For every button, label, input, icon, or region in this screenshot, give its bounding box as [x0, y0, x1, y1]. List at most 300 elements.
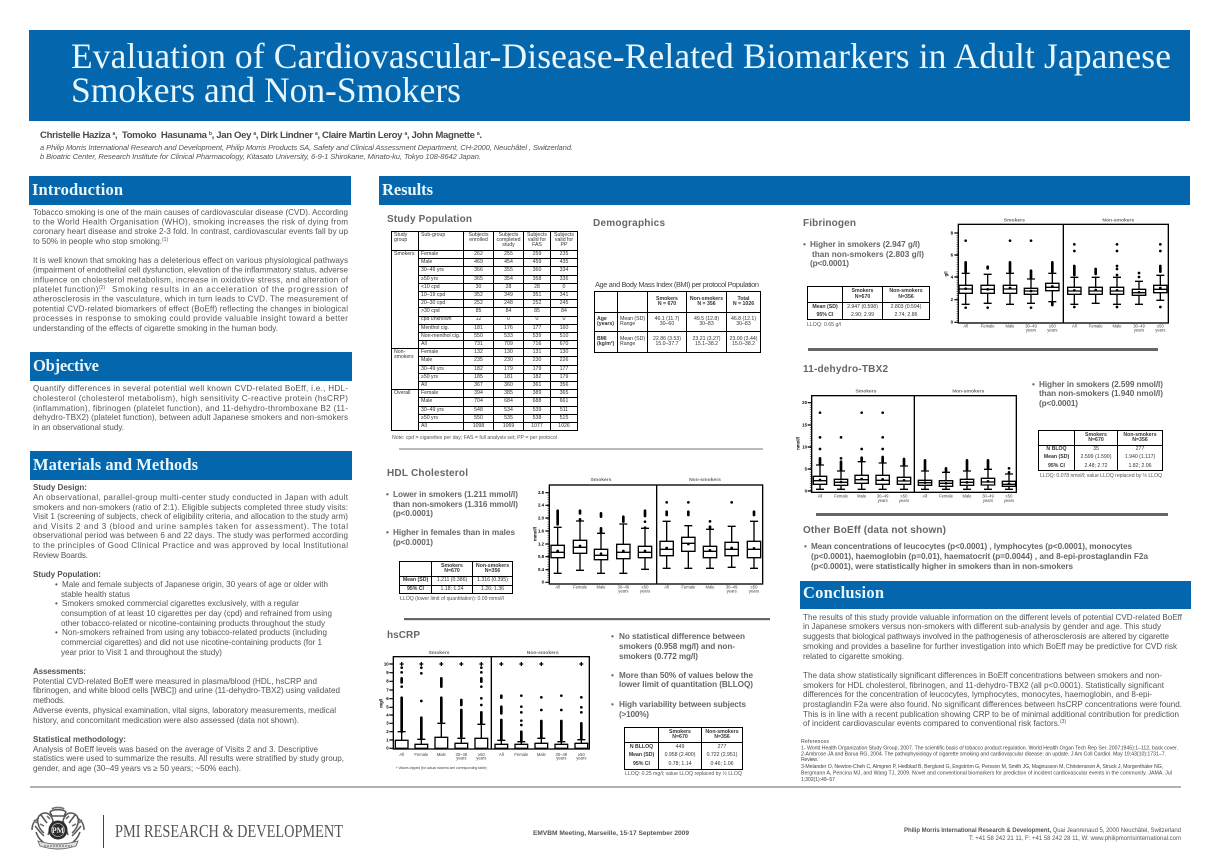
table: study population: 84 [506, 308, 511, 314]
chart: hsCRP boxplot: ≥50 [478, 752, 485, 757]
chart: fibrinogen boxplot: All [1072, 323, 1077, 328]
title banner: Smokers and Non-Smokers [71, 70, 461, 110]
authors and affiliations: Christelle Haziza a, Tomoko Hasunama b, Jan Oey a, Dirk Lindner a, Claire Martin Leroy a, John Magnette a. [40, 130, 482, 141]
table: study population: 511 [560, 407, 568, 413]
table: HDL statistics: 1.211 (0.386) [437, 577, 467, 583]
chart: 11-dehydro-TBX2 boxplot: 20 [802, 400, 808, 405]
chart: 11-dehydro-TBX2 boxplot: 15 [802, 422, 808, 427]
panel: materials and methods: • [55, 599, 58, 608]
chart: HDL boxplot: years [640, 589, 650, 594]
panel: materials and methods: Smokers smoked commercial cigarettes exclusively, with a regular [62, 599, 299, 608]
table: study population: Female [421, 390, 438, 396]
chart: 11-dehydro-TBX2 boxplot: All [923, 494, 927, 499]
heading: hsCRP: hsCRP [387, 630, 420, 641]
table: study population: 252 [474, 300, 483, 306]
table: HDL statistics: 1.316 (0.395) [477, 577, 508, 583]
panel: objective: cholesterol (cholesterol metabolism), high sensitivity C-reactive protein (hsCRP) [33, 394, 348, 403]
chart: HDL boxplot: 0.8 [538, 554, 545, 559]
chart: fibrinogen boxplot: g/l [944, 271, 949, 277]
title banner [29, 30, 1190, 121]
chart: 11-dehydro-TBX2 boxplot: 10 [802, 444, 808, 449]
table: study population: 510 [560, 333, 568, 339]
table: study population: 366 [474, 267, 483, 273]
chart: 11-dehydro-TBX2 boxplot: ≥50 [1006, 494, 1013, 499]
chart: hsCRP boxplot: years [576, 756, 586, 761]
table: study population: 20–30 cpd [421, 300, 445, 306]
table: study population: 354 [504, 276, 513, 282]
panel: conclusion: (3) [1060, 719, 1066, 725]
chart: fibrinogen boxplot: 2 [951, 297, 954, 302]
panel: materials and methods: to the principles of Good Clinical Practice and was approved by local Institutional [33, 541, 348, 550]
table: study population: 28 [506, 284, 511, 290]
table: TBX2 statistics: 2.599 (1.590) [1081, 454, 1111, 460]
chart: fibrinogen boxplot: 30–49 [1025, 323, 1037, 328]
table: study population: ≥50 yrs [421, 276, 438, 282]
text: HDL findings: (p<0.0001) [393, 538, 433, 547]
chart: 11-dehydro-TBX2 boxplot: years [983, 498, 993, 503]
table: TBX2 statistics: 35 [1093, 446, 1099, 452]
table: study population: 361 [533, 382, 541, 388]
logo wordmark: PMI RESEARCH & DEVELOPMENT [115, 821, 343, 841]
text: fibrinogen findings: (p<0.0001) [810, 259, 849, 268]
table: study population: 181 [474, 325, 483, 331]
table: study population: 435 [560, 259, 568, 265]
table: age and BMI: N = 356 [697, 301, 716, 307]
heading: HDL cholesterol: HDL Cholesterol [387, 468, 468, 479]
table: study population: 28 [534, 284, 540, 290]
table: study population: 130 [560, 349, 568, 355]
table: age and BMI: 30–83 [699, 321, 714, 327]
table: study population: 182 [533, 374, 541, 380]
table: study population: 709 [504, 341, 513, 347]
table: study population: Overall [394, 390, 410, 396]
chart: HDL boxplot: Smokers [590, 477, 612, 483]
table: study population: 360 [504, 382, 513, 388]
text: hsCRP findings: • [611, 700, 614, 709]
table: study population: 535 [504, 415, 513, 421]
caption: fibrinogen LLOQ: LLOQ: 0.65 g/l [807, 322, 841, 328]
table: fibrinogen statistics: 2.947 (0.598) [847, 304, 878, 310]
table: study population: 538 [533, 415, 541, 421]
table: study population: 30–49 yrs [421, 407, 444, 413]
table: study population: 533 [504, 333, 513, 339]
table: study population: 661 [560, 398, 568, 404]
table: age and BMI: Range [620, 321, 635, 327]
table: study population: 30 [476, 284, 481, 290]
table: age and BMI: Total [737, 296, 750, 302]
chart: fibrinogen boxplot: 4 [951, 274, 954, 279]
table: age and BMI: Range [620, 341, 635, 347]
table: study population: All [421, 341, 427, 347]
table: study population: 367 [474, 382, 483, 388]
chart: hsCRP boxplot: 1 [386, 737, 389, 742]
text: TBX2 findings: (p<0.0001) [1039, 399, 1078, 408]
table: HDL statistics: Smokers [441, 563, 463, 569]
panel: materials and methods: • [55, 580, 58, 589]
panel: introduction: Smoking results in an acceleration of the progression of [112, 285, 349, 294]
chart: hsCRP boxplot: 10 [384, 661, 389, 666]
text: fibrinogen findings: • [803, 240, 806, 249]
table: study population: 179 [560, 374, 568, 380]
panel: conclusion: smokers for HDL cholesterol, fibrinogen, and 11-dehydro-TBX2 (all p<0.0001). Statistically significant [803, 681, 1165, 690]
panel: materials and methods: Statistical methodology: [33, 735, 126, 744]
chart: fibrinogen boxplot: Female [1089, 323, 1103, 328]
chart: 11-dehydro-TBX2 boxplot: 30–49 [982, 494, 994, 499]
table: fibrinogen statistics: Mean (SD) [812, 304, 838, 310]
references: 1;302(1):49–57 [801, 777, 835, 783]
panel: introduction: to the World Health Organisation (WHO), smoking increases the risk of dying from [33, 218, 348, 227]
panel: conclusion: This is in line with a recent publication showing CRP to be of minimal additional contribution for prediction [803, 710, 1179, 719]
panel: conclusion: The results of this study provide valuable information on the different levels of potential CVD-related BoEff [803, 613, 1183, 622]
chart: hsCRP boxplot: 7 [386, 687, 389, 692]
text: HDL findings: • [386, 528, 389, 537]
table: HDL statistics: 95% CI [407, 586, 424, 592]
table: HDL statistics: 1.18; 1.24 [440, 586, 464, 592]
chart: fibrinogen boxplot: 0 [951, 320, 954, 325]
table: study population: 365 [474, 276, 483, 282]
table: study population: 10–19 cpd [421, 292, 445, 298]
table: study population: 1077 [531, 423, 543, 429]
chart: hsCRP boxplot: All [399, 752, 404, 757]
text: fibrinogen findings [803, 240, 924, 268]
chart: hsCRP boxplot: 6 [386, 696, 389, 701]
table: study population: 358 [533, 276, 541, 282]
table: age and BMI: 49.5 (12.8) [694, 316, 719, 322]
panel: materials and methods: Visit 1 (screening of subjects, check of eligibility criteria, and allocation to the study arm) [33, 512, 348, 521]
table: age and BMI: 46.8 (12.1) [731, 316, 756, 322]
table: study population: 0 [563, 316, 565, 322]
table: study population: 355 [504, 267, 513, 273]
chart: hsCRP boxplot: Female [414, 752, 429, 757]
table: age and BMI: Age [597, 316, 607, 322]
table: study population: 704 [474, 398, 483, 404]
table: age and BMI: (kg/m²) [597, 341, 614, 347]
table: fibrinogen statistics: 2.74; 2.86 [894, 312, 918, 318]
table: HDL statistics [399, 561, 513, 594]
text: hsCRP findings: smokers (0.958 mg/l) and non- [619, 642, 735, 651]
panel: conclusion: smoking and provides a baseline for further investigation into which BoEff may be predictive for CVD risk [803, 642, 1178, 651]
chart: hsCRP boxplot: Smokers [428, 650, 450, 656]
table: study population: 30–49 yrs [421, 366, 444, 372]
chart: HDL boxplot: years [618, 589, 628, 594]
chart: fibrinogen boxplot: years [1155, 328, 1165, 333]
table: study population: <10 cpd [421, 284, 440, 290]
chart: hsCRP boxplot: 30–49 [456, 752, 468, 757]
table: study population: 179 [533, 366, 541, 372]
chart: 11-dehydro-TBX2 boxplot: nmol/l [795, 437, 800, 450]
table: study population: Non-smokers [394, 349, 414, 360]
panel: conclusion: in Japanese smokers versus non-smokers with different sub-analysis by gender and age. This study [803, 622, 1162, 631]
panel: materials and methods: smokers and non-smokers (ratio of 2:1). Eligible subjects completed three study visits: [33, 503, 348, 512]
panel: objective: Quantify differences in several potential well known CVD-related BoEff, i.e., HDL- [33, 384, 348, 393]
table: age and BMI: N = 1026 [733, 301, 754, 307]
title banner: Evaluation of Cardiovascular-Disease-Related Biomarkers in Adult Japanese [71, 36, 1171, 76]
panel: conclusion: of incident cardiovascular events compared to conventional risk factors. [803, 719, 1060, 728]
table: hsCRP statistics: N BLLOQ [630, 744, 653, 750]
table: hsCRP statistics: 0.46; 1.06 [710, 761, 734, 767]
table: study population: ≥50 yrs [421, 415, 438, 421]
panel: materials and methods: year prior to Visit 1 and throughout the study) [61, 648, 222, 657]
panel: materials and methods: Assessments: [33, 667, 86, 676]
chart: HDL boxplot: 2.4 [538, 503, 545, 508]
chart: fibrinogen boxplot: years [1134, 328, 1144, 333]
panel: materials and methods [30, 451, 352, 773]
chart: HDL boxplot: Female [573, 584, 588, 589]
chart: hsCRP boxplot: Male [537, 752, 547, 757]
text: fibrinogen findings: Higher in smokers (2.947 g/l) [810, 240, 920, 249]
chart: HDL boxplot: ≥50 [642, 584, 649, 589]
chart: 11-dehydro-TBX2 boxplot: All [818, 494, 822, 499]
table: study population: 716 [533, 341, 541, 347]
table: study population: 539 [533, 407, 541, 413]
table: HDL statistics: N=670 [444, 568, 460, 574]
table: age and BMI: 30–60 [660, 321, 674, 327]
chart: HDL boxplot: mmol/l [533, 527, 538, 541]
table: study population: 160 [560, 325, 568, 331]
table: study population: 389 [533, 390, 541, 396]
table: fibrinogen statistics: N=356 [898, 294, 914, 300]
table: study population: 1026 [558, 423, 570, 429]
text: other BoEff findings: • [804, 542, 807, 551]
references: References [801, 739, 829, 745]
table: study population: 235 [474, 357, 483, 363]
table: HDL statistics: Mean (SD) [403, 577, 428, 583]
table: study population: 356 [560, 382, 568, 388]
table: hsCRP statistics: 95% CI [633, 761, 650, 767]
table: hsCRP statistics: 0.78; 1.14 [668, 761, 692, 767]
table: age and BMI: 23.00 (3.44) [730, 336, 757, 342]
table: study population: Study group [394, 232, 407, 243]
table: study population: 235 [560, 251, 568, 257]
references: Review. [801, 757, 818, 763]
chart: hsCRP boxplot: + Values clipped (for actual maxima see corresponding table) [396, 766, 487, 770]
table: study population: 341 [560, 292, 568, 298]
table: age and BMI [594, 291, 761, 353]
panel: conclusion: related to cigarette smoking. [803, 652, 904, 661]
text: hsCRP findings: • [611, 632, 614, 641]
table: study population: 459 [533, 259, 541, 265]
contact details: Philip Morris International Research & Development, Quai Jeanrenaud 5, 2000 Neuchâtel, Switzerland [904, 828, 1181, 834]
panel: materials and methods: Materials and Methods [33, 455, 199, 474]
text: other BoEff findings: Mean concentrations of leucocytes (p<0.0001) , lymphocytes (p<0.0001), monocytes [811, 542, 1132, 551]
caption: hsCRP LLOQ: LLOQ: 0.25 mg/l; value LLOQ replaced by ½ LLOQ [625, 770, 742, 777]
caption: study population table note: Note: cpd = cigarettes per day; FAS = full analysis set; PP = per protocol [392, 435, 557, 441]
text: hsCRP findings: • [611, 671, 614, 680]
chart: hsCRP boxplot: 2 [386, 729, 389, 734]
table: study population: 182 [474, 366, 483, 372]
panel: results header: Results [382, 180, 434, 199]
panel: materials and methods: consumption of at least 10 cigarettes per day (cpd) and refrained from using [61, 609, 332, 618]
panel: materials and methods: statistics were used to summarize the results. All results were stratified by study group, [33, 754, 344, 763]
table: age and BMI: 22.86 (3.53) [653, 336, 681, 342]
references: 3-Melander O, Newton-Cheh C, Almgren P, Hedblad B, Berglund G, Engström G, Persson M, Smith JG, Magnusson M, Christensson A, Struck J, Morgenthaler NG, [801, 764, 1163, 770]
table: study population: Subjects enrolled [469, 232, 488, 243]
chart: 11-dehydro-TBX2 boxplot: Non-smokers [952, 388, 984, 394]
icon: PMI crest logo [32, 808, 84, 849]
authors and affiliations: a Philip Morris International Research and Development, Philip Morris Products SA, Safety and Clinical Assessment Department, CH-2000, Neuchâtel , Switzerland. [40, 143, 573, 152]
table: HDL statistics: Non-smokers [476, 563, 509, 569]
table: study population: Smokers [394, 251, 414, 257]
panel: introduction: platelet function). [33, 285, 101, 294]
table: age and BMI: 15.0–37.7 [655, 341, 679, 347]
table: study population: 539 [533, 333, 541, 339]
panel: conclusion [800, 581, 1191, 728]
chart: 11-dehydro-TBX2 boxplot [795, 388, 1016, 503]
table: TBX2 statistics: 2.48; 2.72 [1084, 463, 1108, 469]
table: TBX2 statistics: 277 [1136, 446, 1144, 452]
panel: conclusion: The data show statistically significant differences in BoEff concentrations between smokers and non- [803, 671, 1162, 680]
chart: 11-dehydro-TBX2 boxplot: Female [834, 494, 849, 499]
chart: fibrinogen boxplot: Male [1005, 323, 1015, 328]
table: TBX2 statistics: N=670 [1088, 437, 1104, 443]
table: study population: 12 [476, 316, 481, 322]
chart: 11-dehydro-TBX2 boxplot: years [1004, 498, 1014, 503]
chart: fibrinogen boxplot: Smokers [1004, 218, 1025, 224]
text: other BoEff findings: (p<0.0001), haemoglobin (p=0.01), haematocrit (p=0.0044) , and 8-epi-prostaglandin F2a [811, 552, 1148, 561]
chart: 11-dehydro-TBX2 boxplot: 0 [805, 488, 808, 493]
panel: materials and methods: gender, and age (30–49 years vs ≥ 50 years; ~50% each). [33, 764, 241, 773]
table: hsCRP statistics: 449 [676, 744, 684, 750]
text: other BoEff findings [804, 542, 1148, 571]
table: study population: 259 [533, 251, 541, 257]
contact details [904, 828, 1181, 842]
references: 2-Ambrose JA and Barua RG, 2004. The pathophysiology of cigarette smoking and cardiovascular disease: an update. J Am Coll Cardiol. May 19;43(10):1731–7. [801, 752, 1166, 758]
text: HDL findings: Higher in females than in males [393, 528, 515, 537]
heading: other BoEff: Other BoEff (data not shown) [803, 525, 946, 536]
text: TBX2 findings: Higher in smokers (2.599 nmol/l) [1039, 380, 1163, 389]
table: TBX2 statistics [1038, 430, 1163, 471]
text: HDL findings: (p<0.0001) [393, 509, 433, 518]
text: HDL findings [386, 490, 518, 547]
chart: 11-dehydro-TBX2 boxplot: years [878, 498, 888, 503]
table: study population: 1069 [503, 423, 514, 429]
table: study population: 230 [504, 357, 513, 363]
table: study population: 30–49 yrs [421, 267, 444, 273]
table: study population: 252 [533, 300, 541, 306]
chart: hsCRP boxplot: Non-smokers [527, 650, 559, 656]
chart: HDL boxplot: 1.6 [538, 528, 545, 533]
chart: hsCRP boxplot: ≥50 [578, 752, 585, 757]
panel: materials and methods: Male and female subjects of Japanese origin, 30 years of age or older with [62, 580, 328, 589]
table: study population: 177 [533, 325, 541, 331]
table: study population: 226 [560, 357, 568, 363]
contact details: T: +41 58 242 21 11, F: +41 58 242 28 11, W: www.philipmorrisinternational.com [969, 836, 1181, 842]
chart: hsCRP boxplot: Male [437, 752, 447, 757]
table: study population: 1098 [473, 423, 484, 429]
chart: HDL boxplot: Non-smokers [689, 477, 721, 483]
table: study population: Subjects valid for PP [554, 232, 574, 248]
chart: 11-dehydro-TBX2 boxplot: ≥50 [901, 494, 908, 499]
panel: materials and methods: Study Design: [33, 483, 87, 492]
chart: hsCRP boxplot: 30–49 [556, 752, 568, 757]
chart: fibrinogen boxplot: years [1026, 328, 1036, 333]
panel: materials and methods: Study Population: [33, 570, 101, 579]
panel: materials and methods: Non-smokers refrained from using any tobacco-related products (including [62, 628, 327, 637]
text: HDL findings: Lower in smokers (1.211 mmol/l) [393, 490, 518, 499]
table: fibrinogen statistics: Non-smokers [889, 288, 923, 294]
table: study population [391, 231, 578, 431]
panel: materials and methods: history, and concomitant medication were also assessed (data not shown). [33, 716, 299, 725]
table: age and BMI: (years) [597, 321, 614, 327]
table: study population: 0 [507, 316, 510, 322]
meeting reference: EMVBM Meeting, Marseille, 15-17 September 2009 [533, 830, 689, 837]
table: fibrinogen statistics: N=670 [855, 294, 870, 300]
table: TBX2 statistics: 1.82; 2.06 [1128, 463, 1152, 469]
text: hsCRP findings: High variability between subjects [619, 700, 746, 709]
table: TBX2 statistics: Non-smokers [1123, 432, 1157, 438]
table: study population: 469 [474, 259, 483, 265]
panel: introduction [29, 176, 351, 333]
heading: study population: Study Population [387, 214, 472, 225]
chart: HDL boxplot: All [555, 584, 560, 589]
chart: fibrinogen boxplot: ≥50 [1157, 323, 1164, 328]
chart: 11-dehydro-TBX2 boxplot: Male [857, 494, 867, 499]
table: TBX2 statistics: N=356 [1132, 437, 1148, 443]
table: age and BMI: 30–83 [736, 321, 751, 327]
table: study population: 365 [560, 390, 568, 396]
table: study population: 550 [474, 333, 483, 339]
chart: HDL boxplot: 2.0 [538, 515, 545, 520]
table: study population: 245 [560, 300, 568, 306]
table: study population: Sub-group [421, 232, 445, 238]
authors and affiliations: b Bioatric Center, Research Institute for Clinical Pharmacology, Kitasato University, 6-9-1 Shirokane, Minato-ku, Tokyo 108-8642 Japan. [40, 152, 481, 161]
table: study population: 454 [504, 259, 513, 265]
text: TBX2 findings [1032, 380, 1163, 408]
table: study population: 351 [533, 292, 541, 298]
table: study population: 84 [561, 308, 567, 314]
table: fibrinogen statistics: 2.803 (0.594) [891, 304, 921, 310]
table: study population: 230 [533, 357, 541, 363]
table: hsCRP statistics: 0.958 (2.400) [665, 752, 695, 758]
table: fibrinogen statistics [807, 286, 930, 320]
panel: results header [379, 176, 1190, 205]
table: study population: 262 [474, 251, 483, 257]
panel: conclusion: prostaglandin F2a were also found. No significant differences between hsCRP concentrations were found. [803, 700, 1182, 709]
panel: materials and methods: Potential CVD-related BoEff were measured in plasma/blood (HDL, hsCRP and [33, 677, 317, 686]
text: hsCRP findings: smokers (0.772 mg/l) [619, 652, 698, 661]
table: age and BMI: 23.21 (3.27) [692, 336, 720, 342]
chart: hsCRP boxplot: mg/l [378, 699, 383, 708]
table: age and BMI: 15.1–38.2 [695, 341, 718, 347]
table: fibrinogen statistics: 2.90; 2.99 [851, 312, 874, 318]
table: study population: 179 [504, 366, 513, 372]
table: TBX2 statistics: 95% CI [1048, 463, 1065, 469]
table: study population: 349 [504, 292, 513, 298]
chart: fibrinogen boxplot: Non-smokers [1102, 218, 1134, 224]
references: 1- World Health Organization Study Group, 2007. The scientific basis of tobacco product regulation. World Health Organ Tech Rep Ser. 2007;(945):1–112, back cover. [801, 746, 1178, 752]
table: study population: 177 [560, 366, 568, 372]
chart: fibrinogen boxplot: 8 [951, 230, 954, 235]
panel: introduction: influence on cholesterol metabolism, increase in oxidative stress, and alteration of [33, 275, 349, 284]
text: hsCRP findings [611, 632, 753, 719]
chart: HDL boxplot: 30–49 [726, 584, 738, 589]
table: study population: 248 [504, 300, 513, 306]
text: other BoEff findings: (p<0.0001), were statistically higher in smokers than in non-smokers [811, 562, 1073, 571]
chart: HDL boxplot: Female [681, 584, 696, 589]
caption: TBX2 LLOQ: LLOQ: 0.078 nmol/l; value LLOQ replaced by ½ LLOQ [1040, 472, 1162, 479]
chart: HDL boxplot: 0 [542, 580, 545, 585]
table: hsCRP statistics: 277 [718, 744, 726, 750]
table: hsCRP statistics [624, 727, 743, 770]
panel: objective: in an observational study. [33, 423, 124, 432]
table: study population: Male [421, 357, 432, 363]
table: hsCRP statistics: Mean (SD) [629, 752, 654, 758]
text: hsCRP findings: No statistical difference between [619, 632, 745, 641]
chart: hsCRP boxplot: Female [514, 752, 529, 757]
chart: fibrinogen boxplot: 30–49 [1133, 323, 1145, 328]
panel: conclusion: Conclusion [803, 583, 884, 602]
chart: HDL boxplot: All [664, 584, 669, 589]
